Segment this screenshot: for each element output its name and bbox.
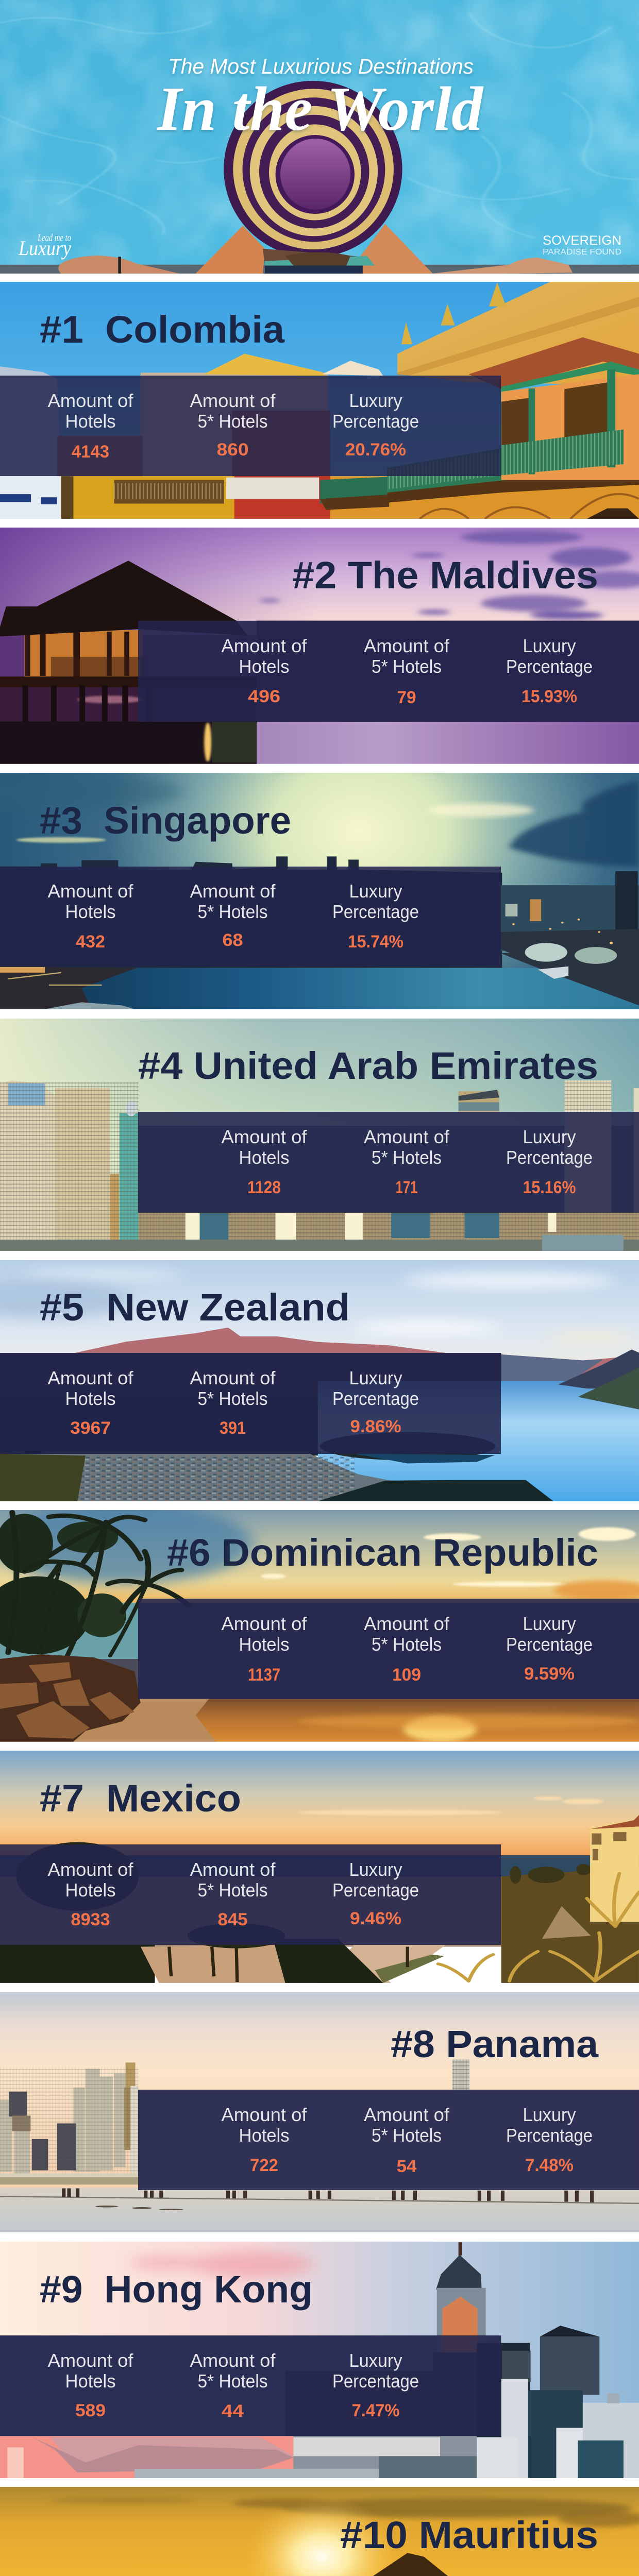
stat: amount of hotels: Hotels <box>239 656 290 677</box>
stat: amount of hotels: Hotels <box>239 1147 290 1168</box>
stat: luxury percentage: 9.46% <box>350 1909 401 1928</box>
stat: amount of hotels: Hotels <box>65 411 115 432</box>
photo: pool water and woman in striped hat <box>0 0 639 274</box>
stat: amount of 5 star hotels: 860 <box>216 440 248 460</box>
hat brim <box>224 81 402 258</box>
stat: amount of 5 star hotels: Amount of <box>190 880 276 902</box>
stat: amount of hotels: 589 <box>75 2401 106 2420</box>
stat: luxury percentage <box>506 1126 593 1197</box>
stat: amount of 5 star hotels: 68 <box>223 930 243 950</box>
stats band <box>138 1112 639 1213</box>
stat: amount of 5 star hotels: Amount of <box>190 390 276 411</box>
stat: amount of hotels: 3967 <box>70 1418 111 1438</box>
logo: Sovereign Paradise Found: SOVEREIGN <box>543 233 621 248</box>
stat: amount of 5 star hotels <box>364 1613 450 1685</box>
stat: amount of 5 star hotels <box>364 2104 450 2176</box>
stat: luxury percentage: Percentage <box>332 1879 419 1901</box>
stat: amount of 5 star hotels: 5* Hotels <box>372 2125 442 2146</box>
stat: luxury percentage: 9.86% <box>350 1417 401 1436</box>
stat: amount of hotels: 432 <box>76 932 105 952</box>
photo: beach resort at sunset <box>0 1751 639 1983</box>
photo: pier and hut at golden sunset <box>0 2487 639 2576</box>
title: The Most Luxurious Destinations <box>168 54 474 78</box>
stat: amount of hotels: Amount of <box>47 1367 134 1388</box>
stat: amount of hotels <box>47 880 134 952</box>
panel: #3 Singapore <box>0 773 639 1009</box>
stat: luxury percentage: 15.93% <box>522 687 577 706</box>
stat: luxury percentage: Percentage <box>332 411 419 432</box>
stat: amount of hotels: Hotels <box>65 2370 115 2392</box>
panel: #8 Panama <box>0 1992 639 2232</box>
stat: amount of 5 star hotels: Amount of <box>190 1859 276 1880</box>
stat: luxury percentage: Luxury <box>523 1126 576 1147</box>
stat: amount of hotels <box>222 1613 308 1685</box>
stat: luxury percentage: 20.76% <box>345 440 406 460</box>
stat: amount of 5 star hotels: 5* Hotels <box>198 2370 268 2392</box>
stat: amount of 5 star hotels: Amount of <box>364 2104 450 2125</box>
stat: amount of hotels: 722 <box>250 2156 278 2175</box>
stat: amount of hotels: 1128 <box>247 1178 281 1197</box>
stat: amount of 5 star hotels: 845 <box>217 1910 247 1929</box>
stats band <box>0 867 501 967</box>
heading: #3 Singapore <box>40 799 291 842</box>
stat: amount of 5 star hotels: 79 <box>397 688 416 707</box>
stat: luxury percentage: Luxury <box>349 390 402 411</box>
stat: amount of 5 star hotels: Amount of <box>190 1367 276 1388</box>
stat: amount of hotels <box>47 1367 134 1438</box>
stat: luxury percentage: Percentage <box>506 2125 593 2146</box>
stat: luxury percentage <box>332 1367 419 1436</box>
logo: Sovereign Paradise Found <box>543 233 621 257</box>
stat: luxury percentage: Luxury <box>523 2104 576 2125</box>
stats band <box>138 2090 639 2190</box>
heading: #8 Panama <box>391 2023 599 2065</box>
stat: amount of 5 star hotels: 5* Hotels <box>372 1634 442 1655</box>
stat: amount of hotels: Amount of <box>47 390 134 411</box>
photo: Dubai marina towers <box>0 1019 639 1251</box>
stat: amount of 5 star hotels: Amount of <box>190 2350 276 2371</box>
stats band <box>0 1844 501 1945</box>
stat: luxury percentage: Luxury <box>349 2350 402 2371</box>
photo: Cartagena colonial balconies <box>0 282 639 519</box>
stat: amount of 5 star hotels: Amount of <box>364 635 450 656</box>
heading: #9 Hong Kong <box>40 2268 313 2311</box>
stat: luxury percentage: Luxury <box>349 880 402 902</box>
stat: amount of hotels: Amount of <box>47 880 134 902</box>
stat: amount of 5 star hotels <box>364 635 450 707</box>
stat: luxury percentage: 15.16% <box>523 1178 576 1197</box>
stat: luxury percentage: Percentage <box>506 1634 593 1655</box>
heading: #5 New Zealand <box>40 1286 350 1329</box>
stats band <box>138 1599 639 1699</box>
heading: #7 Mexico <box>40 1777 241 1820</box>
stat: amount of 5 star hotels: 5* Hotels <box>198 1388 268 1409</box>
stat: luxury percentage <box>332 1859 419 1928</box>
stats band <box>138 621 639 722</box>
stat: amount of 5 star hotels: 5* Hotels <box>198 1879 268 1901</box>
stat: amount of hotels: Amount of <box>47 1859 134 1880</box>
stat: luxury percentage <box>332 2350 419 2420</box>
stat: luxury percentage: Luxury <box>349 1859 402 1880</box>
stat: luxury percentage: 7.48% <box>525 2156 574 2175</box>
stat: amount of hotels: Hotels <box>65 901 115 922</box>
stat: amount of 5 star hotels: Amount of <box>364 1126 450 1147</box>
stat: luxury percentage <box>332 390 419 460</box>
panel: #9 Hong Kong <box>0 2242 639 2478</box>
stat: amount of 5 star hotels: 391 <box>220 1418 246 1438</box>
panel: #2 The Maldives <box>0 528 639 764</box>
stat: amount of 5 star hotels: 5* Hotels <box>198 901 268 922</box>
heading: #4 United Arab Emirates <box>138 1044 598 1087</box>
heading: #6 Dominican Republic <box>167 1531 598 1574</box>
stat: luxury percentage: 15.74% <box>348 932 403 952</box>
logo: Sovereign Paradise Found: PARADISE FOUND <box>543 248 621 257</box>
panel: #6 Dominican Republic <box>0 1510 639 1742</box>
stat: luxury percentage <box>506 1613 593 1684</box>
stat: amount of 5 star hotels: 109 <box>392 1665 421 1685</box>
heading: #1 Colombia <box>40 308 285 351</box>
stat: luxury percentage <box>506 2104 593 2175</box>
stats band <box>0 376 501 476</box>
stat: luxury percentage: 9.59% <box>524 1664 575 1684</box>
stat: amount of hotels <box>47 390 134 462</box>
stat: luxury percentage <box>332 880 419 952</box>
stat: amount of 5 star hotels: 44 <box>222 2401 244 2421</box>
stat: amount of hotels: Amount of <box>222 1613 308 1634</box>
stat: luxury percentage: Percentage <box>506 1147 593 1168</box>
stat: amount of hotels: Hotels <box>65 1879 115 1901</box>
stat: amount of hotels: 8933 <box>71 1910 110 1929</box>
stats band <box>0 2335 501 2436</box>
stat: amount of 5 star hotels: Amount of <box>364 1613 450 1634</box>
stat: amount of hotels <box>222 1126 308 1197</box>
stat: amount of hotels: Amount of <box>47 2350 134 2371</box>
stat: amount of 5 star hotels <box>190 1367 276 1438</box>
stat: luxury percentage: Luxury <box>523 1613 576 1634</box>
stat: amount of hotels <box>47 1859 134 1929</box>
stat: amount of hotels: Amount of <box>222 2104 308 2125</box>
stat: amount of 5 star hotels: 5* Hotels <box>372 1147 442 1168</box>
stat: amount of 5 star hotels <box>190 2350 276 2421</box>
hero header <box>0 0 639 274</box>
panel: #7 Mexico <box>0 1751 639 1983</box>
stat: amount of hotels: 4143 <box>72 442 109 462</box>
photo: Hong Kong towers and convention centre <box>0 2242 639 2478</box>
photo: Singapore skyline at dusk <box>0 773 639 1009</box>
panel: #10 Mauritius <box>0 2487 639 2576</box>
panel: #4 United Arab Emirates <box>0 1019 639 1251</box>
stat: amount of hotels <box>222 635 308 706</box>
stat: amount of 5 star hotels <box>190 1859 276 1929</box>
stat: amount of 5 star hotels <box>190 880 276 950</box>
stats band <box>0 1353 501 1454</box>
stat: luxury percentage: Luxury <box>349 1367 402 1388</box>
photo: over-water hut at purple dusk <box>0 528 639 764</box>
stat: amount of hotels: Amount of <box>222 1126 308 1147</box>
stat: amount of 5 star hotels: 5* Hotels <box>198 411 268 432</box>
photo: Queenstown lake and mountains <box>0 1260 639 1501</box>
stat: amount of hotels: Hotels <box>239 1634 290 1655</box>
stat: amount of 5 star hotels <box>364 1126 450 1197</box>
stat: luxury percentage <box>506 635 593 706</box>
arms and hands on pool edge <box>0 224 639 274</box>
stat: luxury percentage: 7.47% <box>351 2401 400 2420</box>
heading: #10 Mauritius <box>340 2514 598 2556</box>
stat: amount of hotels: 1137 <box>248 1665 280 1685</box>
stat: luxury percentage: Percentage <box>332 2370 419 2392</box>
title: In the World <box>156 74 484 144</box>
stat: amount of hotels: Hotels <box>239 2125 290 2146</box>
panel: #5 New Zealand <box>0 1260 639 2576</box>
stat: luxury percentage: Percentage <box>332 901 419 922</box>
panel: #1 Colombia <box>0 282 639 519</box>
stat: amount of 5 star hotels: 171 <box>396 1178 417 1197</box>
stat: amount of 5 star hotels: 5* Hotels <box>372 656 442 677</box>
stat: amount of hotels: Amount of <box>222 635 308 656</box>
stat: amount of hotels: 496 <box>248 687 280 706</box>
stat: luxury percentage: Percentage <box>332 1388 419 1409</box>
photo: Panama City skyline over calm bay <box>0 1992 639 2232</box>
stat: luxury percentage: Percentage <box>506 656 593 677</box>
stat: luxury percentage: Luxury <box>523 635 576 656</box>
stat: amount of hotels <box>222 2104 308 2175</box>
stat: amount of 5 star hotels: 54 <box>397 2157 417 2176</box>
stat: amount of 5 star hotels <box>190 390 276 460</box>
heading: #2 The Maldives <box>292 554 598 597</box>
photo: palm beach at sunset <box>0 1503 639 1742</box>
stat: amount of hotels: Hotels <box>65 1388 115 1409</box>
logo: Lead me to Luxury: Luxury <box>18 236 71 260</box>
logo: Lead me to Luxury: Lead me to <box>37 232 71 244</box>
stat: amount of hotels <box>47 2350 134 2420</box>
